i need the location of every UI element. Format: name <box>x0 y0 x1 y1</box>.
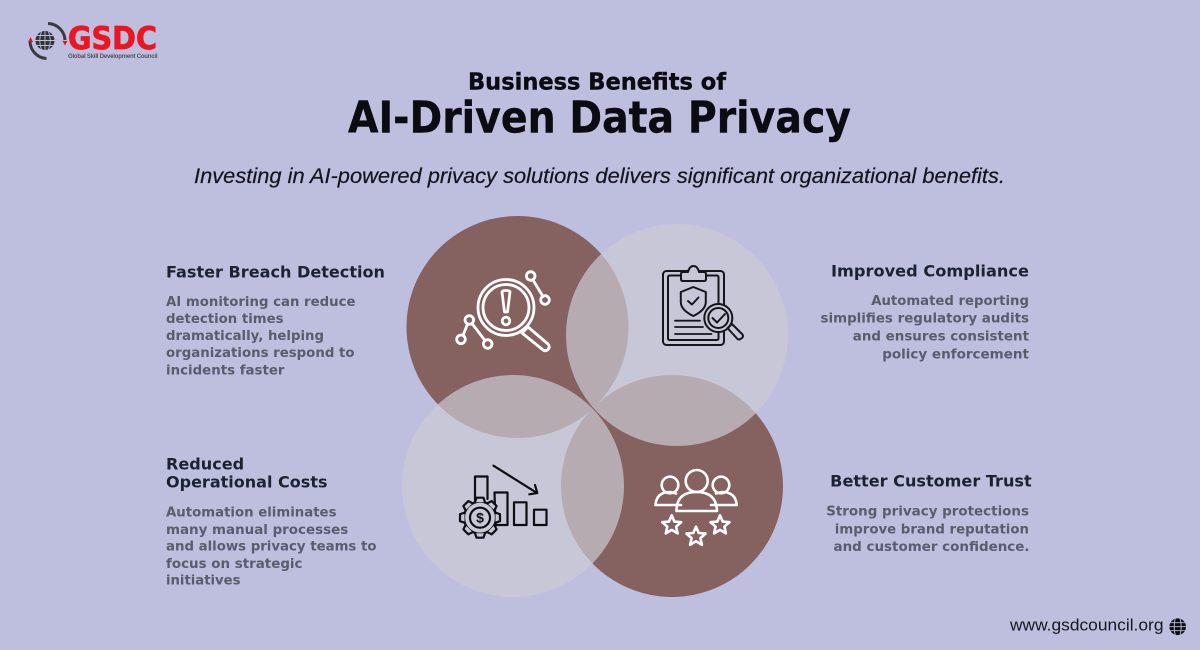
venn diagram <box>402 216 788 597</box>
heading: Improved Compliance <box>831 262 1029 281</box>
subtitle: Investing in AI-powered privacy solutions delivers significant organizational benefits. <box>194 165 1005 188</box>
body text: Automation eliminates <box>166 505 336 521</box>
body text: organizations respond to <box>166 345 354 361</box>
logo: GSDC <box>28 21 158 60</box>
body text: and ensures consistent <box>853 329 1030 345</box>
gear: $ <box>476 510 484 526</box>
body text: detection times <box>166 311 284 327</box>
icon: cost reduction chart <box>460 466 546 538</box>
panel: better customer trust <box>826 472 1032 555</box>
title <box>348 70 851 144</box>
body text: dramatically, helping <box>166 328 324 344</box>
heading: Operational Costs <box>166 472 328 491</box>
body text: AI monitoring can reduce <box>166 294 356 310</box>
heading: Faster Breach Detection <box>166 262 385 282</box>
heading <box>166 454 328 491</box>
body text <box>166 294 356 378</box>
body text <box>826 504 1030 555</box>
body text: and allows privacy teams to <box>166 539 376 555</box>
title: Business Benefits of <box>468 70 727 96</box>
icon: magnifier with alert <box>457 272 549 351</box>
body text: improve brand reputation <box>835 521 1029 537</box>
icon: compliance clipboard <box>663 266 743 345</box>
body text: incidents faster <box>166 362 285 378</box>
icon: footer globe <box>1169 618 1186 635</box>
circle: top left <box>406 216 628 438</box>
heading: Better Customer Trust <box>830 472 1032 491</box>
logo wordmark: GSDC <box>68 21 157 57</box>
body text: simplifies regulatory audits <box>820 311 1029 327</box>
title: AI-Driven Data Privacy <box>348 93 851 144</box>
panel: reduced operational costs <box>166 454 376 589</box>
body text: focus on strategic <box>166 556 302 572</box>
logo tagline: Global Skill Development Council <box>68 54 158 60</box>
heading: Reduced <box>166 454 244 473</box>
circle: bottom right <box>561 375 783 597</box>
body text <box>166 505 376 589</box>
icon: customers and stars <box>656 470 737 545</box>
body text: policy enforcement <box>882 346 1030 362</box>
footer website: www.gsdcouncil.org <box>1009 616 1164 634</box>
circle: top right <box>566 224 788 446</box>
body text: Automated reporting <box>871 293 1029 309</box>
body text: and customer confidence. <box>834 539 1030 555</box>
body text <box>820 293 1030 362</box>
body text: initiatives <box>166 573 240 589</box>
circle: bottom left <box>402 375 624 597</box>
panel: improved compliance <box>820 262 1030 362</box>
panel: faster breach detection <box>166 262 385 378</box>
body text: many manual processes <box>166 522 348 538</box>
icon: logo globe <box>28 24 68 58</box>
body text: Strong privacy protections <box>826 504 1029 520</box>
